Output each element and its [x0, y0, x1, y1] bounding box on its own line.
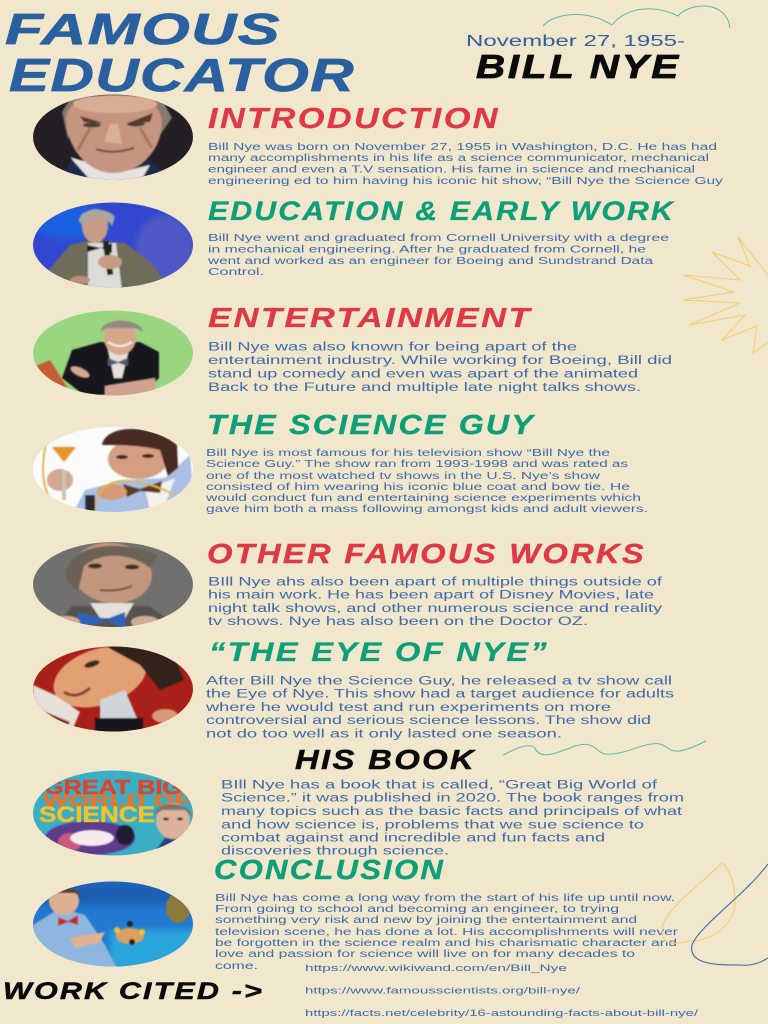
heading: his book: HIS BOOK: [295, 744, 476, 775]
photo: book cover: WORLD OF: [43, 791, 191, 810]
text: the eye of nye: not do too well as it only lasted one season.: [206, 728, 562, 740]
photo: young science guy: [33, 427, 195, 515]
heading: entertainment: ENTERTAINMENT: [208, 302, 533, 333]
decorative green arc: [543, 6, 730, 28]
photo: blue bow tie portrait: [33, 538, 193, 628]
name: Bill Nye: BILL NYE: [476, 48, 681, 85]
text: introduction: [208, 142, 723, 187]
photo: green screen in suit: [33, 310, 193, 396]
text: the eye of nye: the Eye of Nye. This show had a target audience for adults: [206, 688, 674, 700]
decorative yellow teardrop: [662, 863, 735, 943]
text: other famous works: his main work. He has been apart of Disney Movies, late: [208, 590, 654, 602]
title: [5, 5, 355, 101]
text: conclusion: television scene, he has done a lot. His accomplishments will never: [215, 927, 679, 938]
text: the eye of nye: [204, 676, 674, 740]
text: his book: discoveries through science.: [221, 846, 449, 858]
text: entertainment: entertainment industry. While working for Boeing, Bill did: [208, 355, 672, 367]
text: conclusion: From going to school and becoming an engineer, to trying: [215, 904, 619, 915]
text: conclusion: come.: [215, 961, 258, 972]
photo: book cover: [33, 770, 195, 858]
date: November 27, 1955-: [466, 33, 685, 50]
text: the science guy: [204, 448, 648, 515]
heading: introduction: INTRODUCTION: [208, 103, 500, 135]
text: the science guy: Science Guy.” The show ran from 1993-1998 and was rated as: [206, 459, 628, 470]
title: EDUCATOR: [9, 49, 355, 101]
photo: book cover: SCIENCE: [39, 802, 155, 827]
heading: conclusion: CONCLUSION: [214, 854, 445, 885]
text: his book: combat against and incredible and fun facts and: [221, 832, 605, 844]
heading: the science guy: THE SCIENCE GUY: [207, 409, 535, 440]
text: entertainment: stand up comedy and even was apart of the animated: [208, 368, 638, 380]
text: the science guy: consisted of him wearing his iconic blue coat and bow tie. He: [206, 482, 631, 493]
photo: science guy with molecule: [33, 881, 195, 970]
decorative yellow star burst: [683, 237, 768, 353]
photo: portrait: [33, 94, 193, 182]
text: introduction: Bill Nye was born on November 27, 1955 in Washington, D.C. He has had: [208, 142, 717, 153]
text: entertainment: Back to the Future and multiple late night talks shows.: [208, 382, 641, 394]
decorative green wave: [503, 741, 706, 755]
text: the eye of nye: After Bill Nye the Science Guy, he released a tv show call: [206, 676, 672, 688]
text: his book: many topics such as the basic facts and principals of what: [221, 806, 683, 818]
heading: other famous works: OTHER FAMOUS WORKS: [207, 538, 646, 569]
text: other famous works: night talk shows, and other numerous science and reality: [208, 603, 662, 615]
citation links: https://facts.net/celebrity/16-astounding-facts-about-bill-nye/: [305, 1008, 699, 1019]
heading: education and early work: EDUCATION & EARLY WORK: [208, 196, 676, 226]
text: conclusion: [215, 893, 679, 972]
decorative blue loop: [692, 864, 768, 965]
heading: the eye of nye: “THE EYE OF NYE”: [209, 637, 549, 667]
text: the eye of nye: controversial and serious science lessons. The show did: [206, 715, 651, 727]
text: education and early work: [206, 233, 670, 278]
text: conclusion: be forgotten in the science realm and his charismatic character and: [215, 938, 677, 949]
text: the science guy: Bill Nye is most famous for his television show “Bill Nye the: [206, 448, 611, 459]
text: entertainment: [208, 342, 672, 394]
photo: book cover: GREAT BIG: [44, 777, 182, 799]
text: other famous works: [208, 576, 663, 628]
citation links: [305, 963, 699, 1019]
text: his book: [221, 780, 684, 858]
work cited label: WORK CITED ->: [3, 978, 264, 1005]
text: his book: Science.” it was published in 2020. The book ranges from: [221, 792, 684, 804]
text: his book: BIll Nye has a book that is called, “Great Big World of: [221, 780, 658, 792]
citation links: https://www.wikiwand.com/en/Bill_Nye: [305, 963, 567, 974]
text: entertainment: Bill Nye was also known for being apart of the: [208, 342, 577, 354]
text: conclusion: something very risk and new by joining the entertainment and: [215, 915, 637, 926]
text: introduction: engineer and even a T.V sensation. His fame in science and mechanical: [208, 164, 695, 176]
text: the science guy: gave him both a mass following amongst kids and adult viewers.: [206, 504, 648, 515]
text: education and early work: in mechanical engineering. After he graduated from Cornell, he: [208, 244, 647, 256]
text: education and early work: Bill Nye went and graduated from Cornell University with a degree: [208, 233, 670, 244]
text: introduction: engineering ed to him having his iconic hit show, “Bill Nye the Science Guy: [208, 176, 723, 187]
text: the science guy: one of the most watched tv shows in the U.S. Nye’s show: [206, 471, 601, 482]
text: the eye of nye: where he would test and run experiments on more: [204, 702, 611, 714]
text: other famous works: BIll Nye ahs also been apart of multiple things outside of: [208, 576, 663, 588]
citation links: https://www.famousscientists.org/bill-nye/: [305, 986, 581, 996]
photo: on stage with microphone: [30, 202, 195, 290]
text: conclusion: love and passion for science will live on for many decades to: [215, 949, 636, 960]
text: other famous works: tv shows. Nye has also been on the Doctor OZ.: [208, 616, 588, 628]
text: conclusion: Bill Nye has come a long way from the start of his life up until now.: [215, 893, 675, 904]
title: FAMOUS: [5, 5, 281, 54]
photo: eye of nye close-up: [33, 646, 193, 732]
text: education and early work: Control.: [208, 267, 264, 278]
text: the science guy: would conduct fun and entertaining science experiments which: [204, 493, 641, 504]
text: education and early work: went and worked as an engineer for Boeing and Sundstrand Data: [206, 256, 654, 267]
text: his book: and how science is, problems that we sue science to: [221, 820, 644, 832]
text: introduction: many accomplishments in his life as a science communicator, mechanical: [208, 153, 709, 164]
